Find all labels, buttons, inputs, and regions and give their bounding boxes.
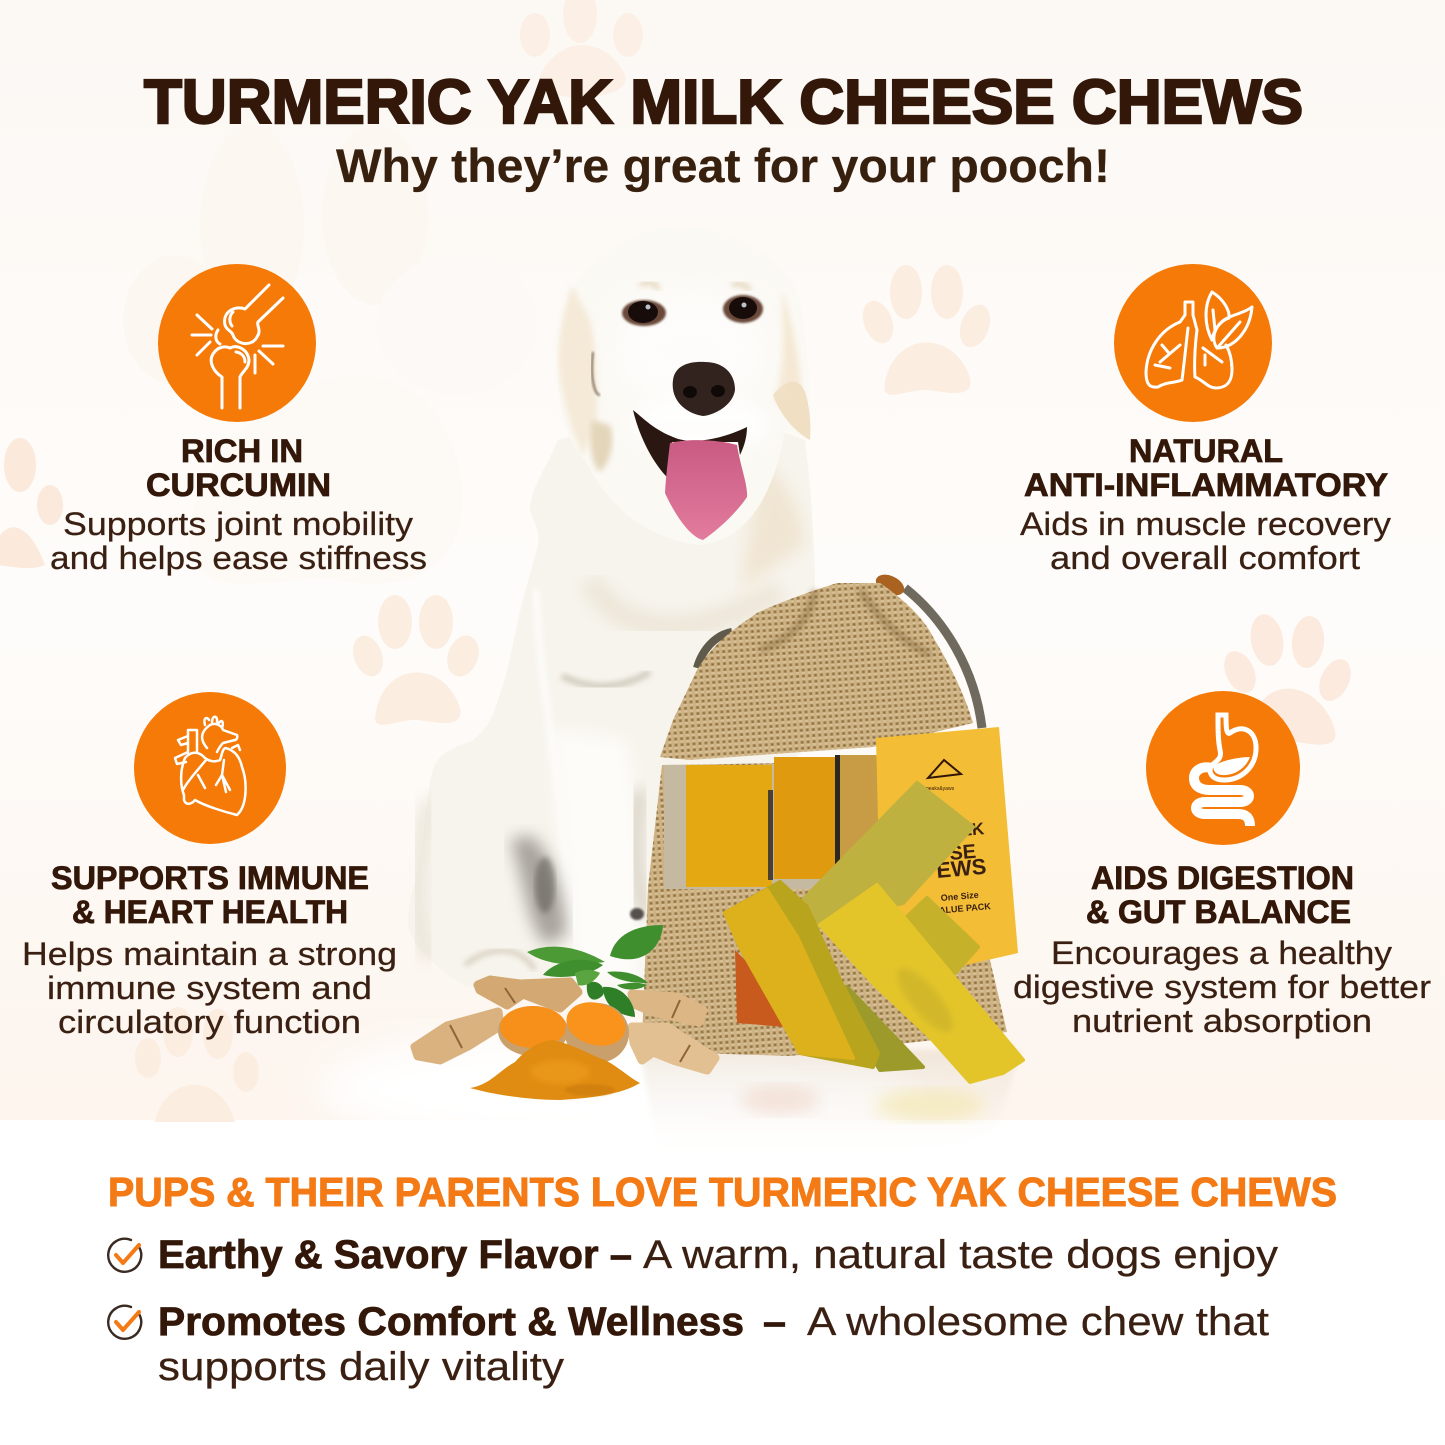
turmeric roots — [415, 980, 715, 1070]
turmeric powder — [470, 1040, 640, 1100]
chew: back olive — [800, 783, 973, 923]
text: – — [763, 1300, 786, 1344]
turmeric leaves — [527, 925, 663, 1017]
description: Aids in muscle recovery — [1020, 506, 1391, 542]
heading: & HEART HEALTH — [72, 894, 348, 930]
dog head — [558, 227, 811, 545]
bag rope and bead — [697, 571, 982, 728]
heading: NATURAL — [1129, 433, 1283, 469]
dog fur shading — [417, 460, 805, 985]
description: nutrient absorption — [1072, 1003, 1372, 1039]
turmeric slices — [498, 996, 630, 1063]
product tag: VALUE PACK — [933, 901, 992, 916]
panel: immune and heart health — [22, 692, 397, 1040]
chew: back right — [907, 898, 978, 973]
icon: stomach and intestine — [1146, 691, 1300, 845]
dog photo illustration — [408, 227, 830, 990]
dog mouth — [633, 410, 747, 477]
description — [1013, 935, 1431, 1039]
heading: SUPPORTS IMMUNE — [51, 860, 369, 896]
turmeric roots, powder and leaves — [415, 925, 715, 1100]
text: A wholesome chew that — [807, 1300, 1269, 1344]
chew: under — [847, 987, 923, 1070]
heading — [1086, 860, 1354, 930]
product tag: SE — [949, 841, 977, 865]
description — [22, 936, 397, 1040]
heading: RICH IN — [181, 433, 303, 469]
product tag: EWS — [935, 854, 987, 883]
dog ears — [558, 285, 810, 472]
description — [50, 506, 427, 576]
panel: natural anti-inflammatory — [1020, 264, 1391, 576]
product: burlap bag with chews — [642, 571, 1023, 1082]
product tag — [876, 727, 1018, 967]
description: Helps maintain a strong — [22, 936, 397, 972]
icon: check — [108, 1239, 141, 1272]
icon: joint — [158, 264, 316, 422]
description: Encourages a healthy — [1051, 935, 1392, 971]
heading — [51, 860, 369, 930]
description — [1020, 506, 1391, 576]
subtitle: Why they’re great for your pooch! — [336, 139, 1110, 192]
heading: ANTI-INFLAMMATORY — [1024, 467, 1388, 503]
panel: digestion and gut balance — [1013, 691, 1431, 1039]
bag lower body — [642, 760, 1007, 1056]
white floor glow under product — [320, 1030, 920, 1150]
description: circulatory function — [58, 1004, 361, 1040]
text — [158, 1233, 1278, 1277]
dog tongue — [665, 440, 747, 540]
text — [158, 1300, 1269, 1389]
product tag: meric — [932, 807, 956, 817]
dog body — [408, 400, 830, 990]
icon: lungs and leaves — [1114, 264, 1272, 422]
heading: & GUT BALANCE — [1086, 894, 1351, 930]
heading — [146, 433, 331, 503]
background paw prints — [0, 0, 1357, 1122]
bag top flap — [660, 583, 973, 760]
text: Promotes Comfort & Wellness — [158, 1300, 744, 1344]
icon: heart — [134, 692, 286, 844]
heading: AIDS DIGESTION — [1091, 860, 1354, 896]
text: Earthy & Savory Flavor – — [158, 1233, 632, 1277]
chew: front — [820, 885, 1023, 1082]
heading: CURCUMIN — [146, 467, 331, 503]
description: Supports joint mobility — [63, 506, 413, 542]
chew: left — [725, 882, 878, 1067]
heading — [1024, 433, 1388, 503]
product tag: LK — [961, 819, 986, 840]
benefit: promotes comfort and wellness — [108, 1300, 1269, 1389]
description: and overall comfort — [1050, 540, 1360, 576]
description: digestive system for better — [1013, 969, 1431, 1005]
text: A warm, natural taste dogs enjoy — [643, 1233, 1278, 1277]
icon: check — [108, 1306, 141, 1339]
panel: rich in curcumin — [50, 264, 427, 576]
product tag: One Size — [940, 890, 979, 903]
description: and helps ease stiffness — [50, 540, 427, 576]
product tag: peaks&yaws — [926, 786, 955, 792]
leather patch — [735, 950, 785, 1027]
product reflection — [640, 1050, 1020, 1167]
dog eyes — [622, 295, 763, 326]
dog nose — [673, 362, 735, 416]
title: TURMERIC YAK MILK CHEESE CHEWS — [144, 68, 1303, 137]
text: supports daily vitality — [158, 1345, 564, 1389]
bag window — [664, 755, 886, 889]
dog face highlights — [610, 282, 770, 453]
benefit: earthy and savory flavor — [108, 1233, 1278, 1277]
description: immune system and — [47, 970, 372, 1006]
bottom heading: PUPS & THEIR PARENTS LOVE TURMERIC YAK CHEESE CHEWS — [108, 1169, 1337, 1215]
